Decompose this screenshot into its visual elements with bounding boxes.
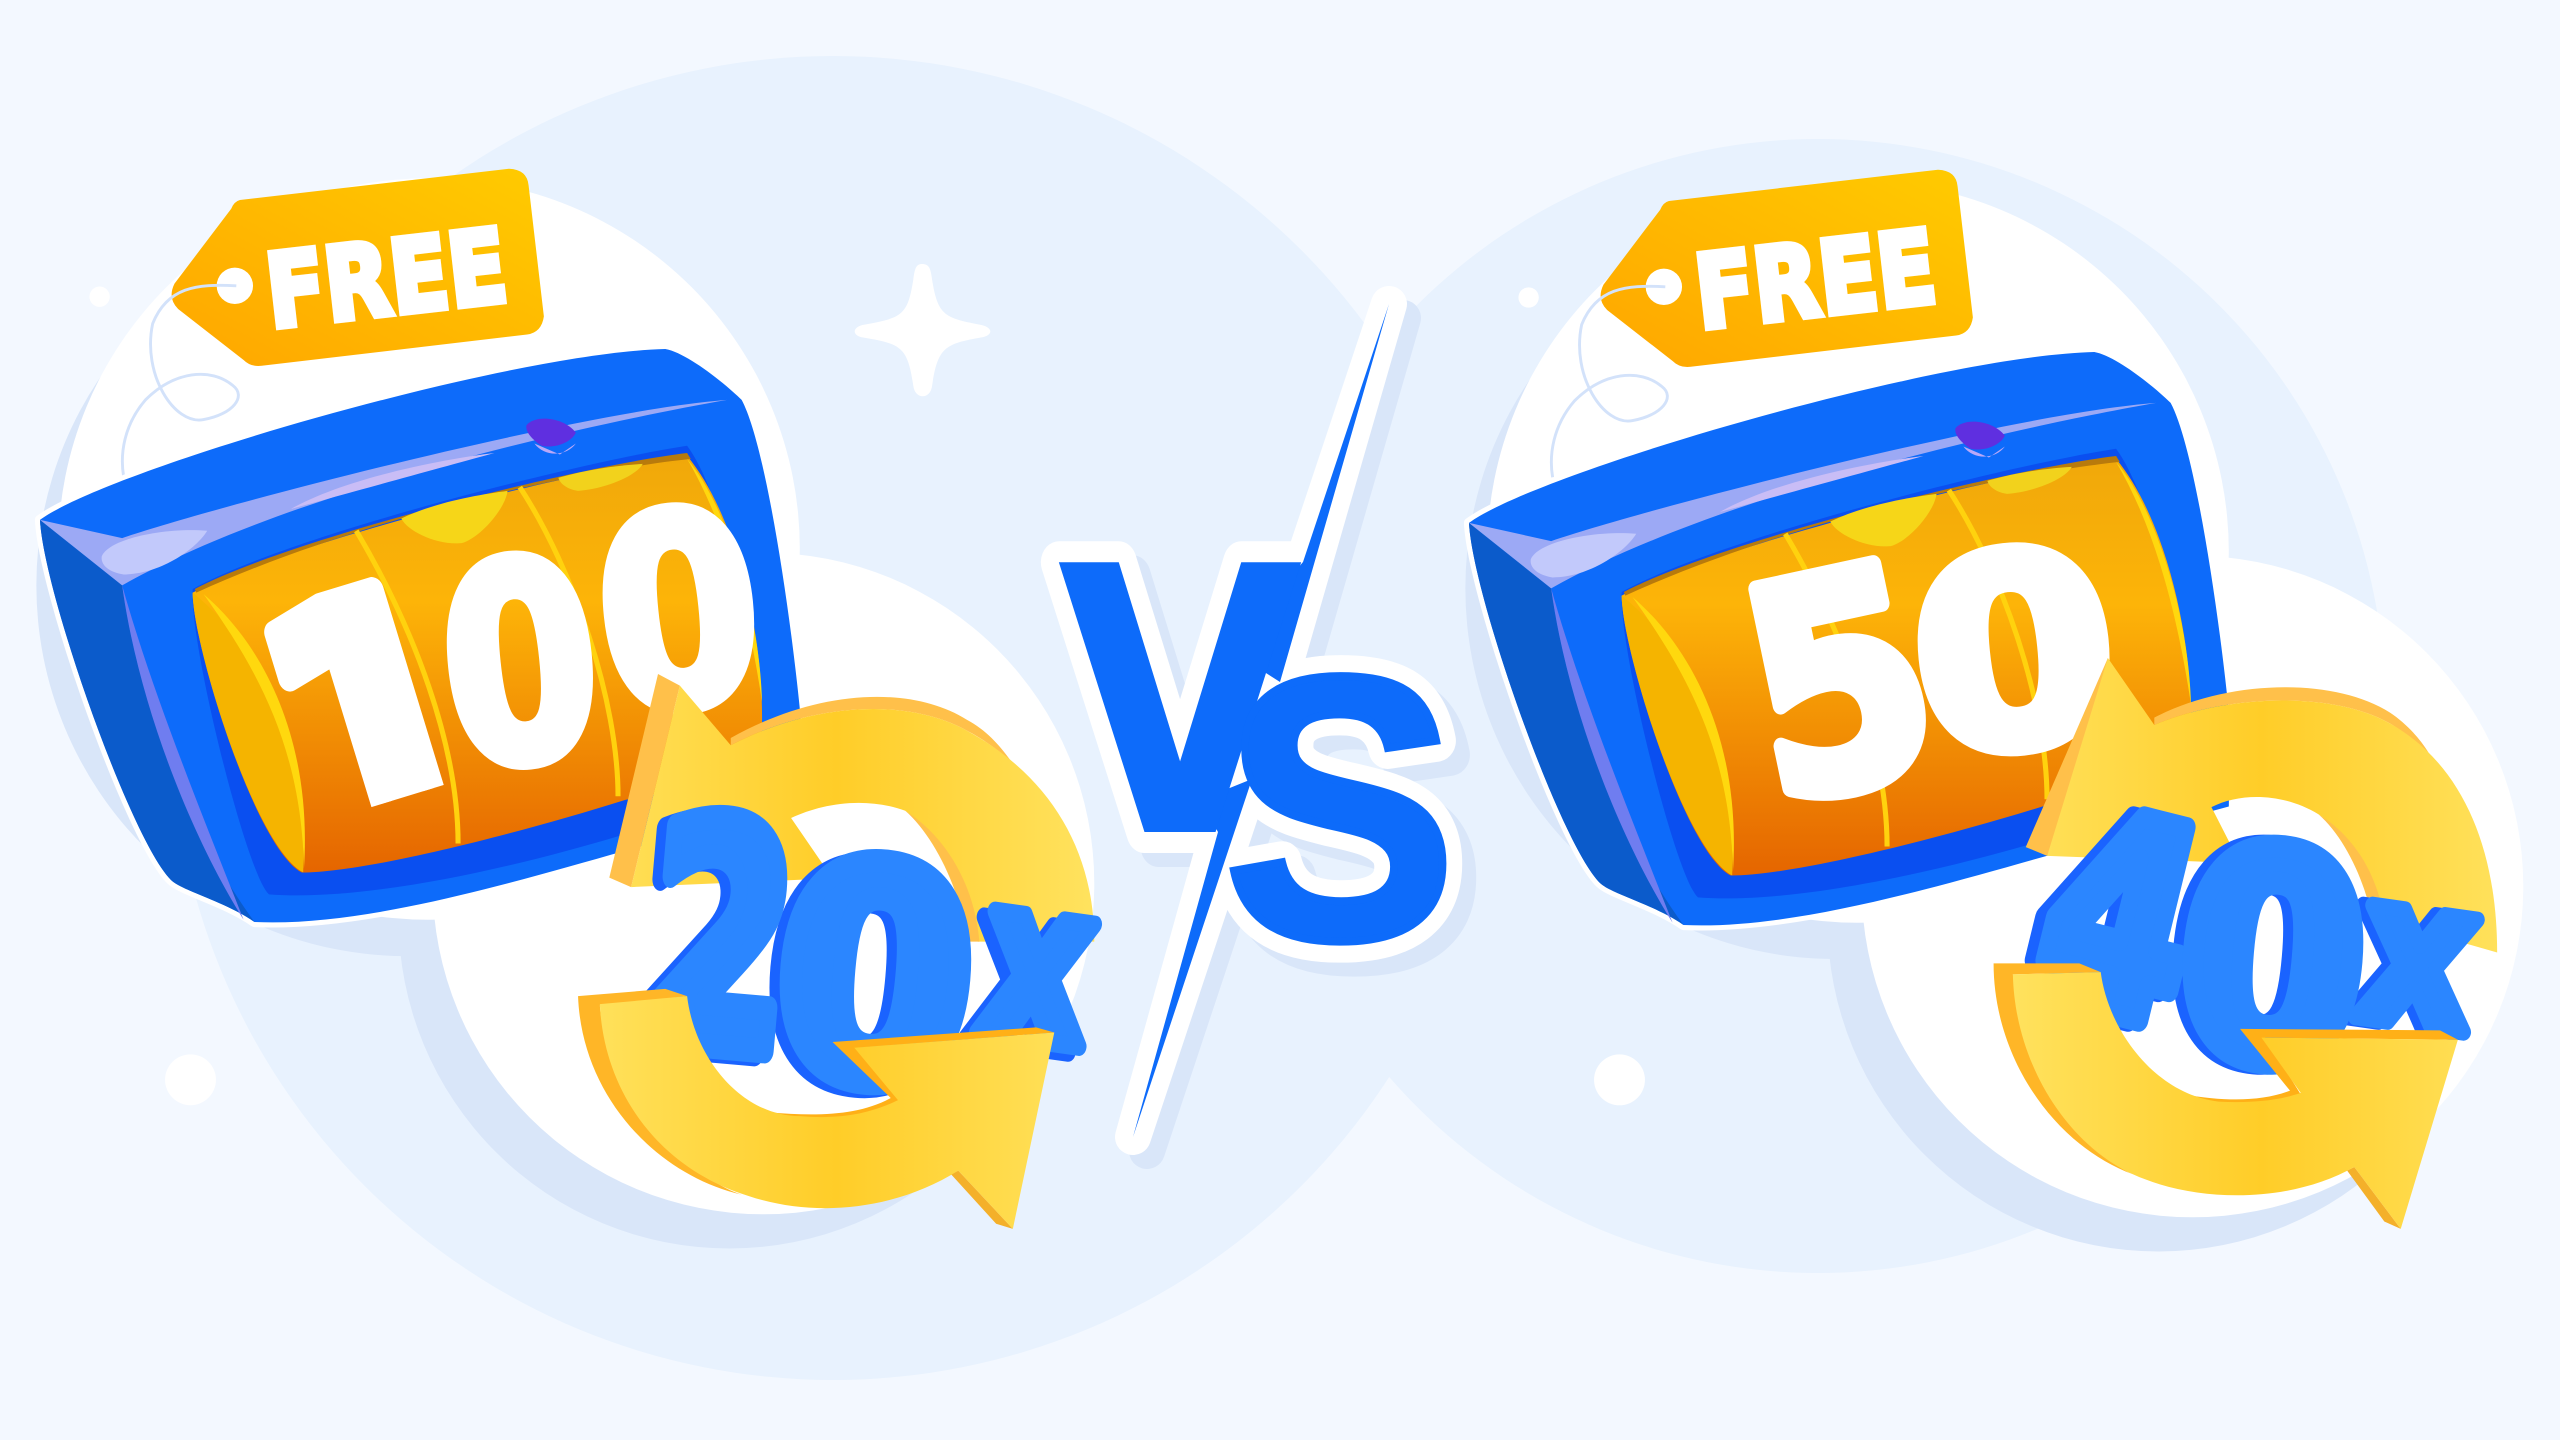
slot number 50	[1718, 493, 2130, 870]
right number face: x	[2346, 826, 2493, 1082]
versus outline: S	[1224, 598, 1456, 1018]
icon: sparkle star	[855, 264, 990, 396]
versus emblem	[1057, 304, 1470, 1151]
right circle backdrop	[1465, 181, 2523, 1251]
reel dividers	[356, 487, 618, 843]
number face: x	[966, 826, 1111, 1101]
number face	[633, 756, 1111, 1157]
number face: 0	[763, 798, 987, 1157]
slot number 100: 0	[427, 499, 614, 831]
right free tag: FREE	[1689, 209, 1942, 354]
number shadow: 2	[623, 759, 798, 1129]
right wagering arrow top	[2026, 658, 2497, 953]
free tag	[122, 169, 544, 476]
versus outline	[1057, 304, 1456, 1137]
right wagering arrow bottom	[1994, 963, 2458, 1229]
panel: left offer	[36, 169, 1111, 1248]
number shadow	[623, 759, 1100, 1160]
right number shadow	[2000, 746, 2484, 1135]
versus shadow: S	[1238, 612, 1470, 1032]
right number face: 4	[2011, 746, 2231, 1092]
circle backdrop	[58, 178, 1094, 1214]
wagering arrow bottom	[578, 989, 1054, 1229]
wagering number 20x	[623, 756, 1111, 1160]
right slot machine	[1469, 352, 2230, 925]
slot number 100	[264, 502, 754, 808]
right number shadow: x	[2336, 826, 2484, 1082]
right number face: 0	[2166, 786, 2378, 1135]
right free tag	[1551, 170, 1973, 477]
wagering arrow top	[609, 674, 1094, 942]
tag string	[122, 285, 238, 476]
slot number 50: 0	[1898, 493, 2130, 817]
wagering number 40x	[2000, 746, 2493, 1135]
versus outline: V	[1057, 489, 1305, 920]
number shadow: 0	[753, 801, 977, 1160]
panel: right offer	[1465, 170, 2523, 1251]
right number face	[2011, 746, 2493, 1135]
right number shadow: 0	[2156, 786, 2368, 1135]
small dots	[89, 287, 216, 1105]
tag text: FREE	[260, 208, 513, 353]
right number shadow: 4	[2000, 746, 2220, 1092]
circle backdrop shadow	[36, 215, 1060, 1248]
slot number 100: 0	[583, 453, 775, 775]
versus shadow: V	[1071, 503, 1319, 934]
versus letters: V	[1057, 489, 1305, 920]
number face: 2	[633, 756, 808, 1126]
slot number 50: 5	[1718, 500, 1962, 870]
versus shadow	[1071, 318, 1470, 1151]
slot machine	[40, 349, 801, 922]
slot number 100: 1	[217, 500, 546, 974]
background blobs	[171, 56, 2385, 1380]
versus letters	[1057, 304, 1456, 1137]
number shadow: x	[955, 831, 1100, 1107]
versus letters: S	[1224, 598, 1456, 1018]
